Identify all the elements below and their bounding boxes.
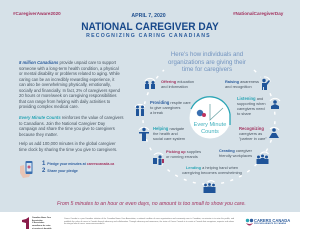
logo text: Carers Canada: CARERS CANADA	[254, 218, 290, 223]
text: providing: Providing respite care	[150, 100, 191, 105]
icon: helping	[138, 127, 150, 141]
footer: et services à domicile	[32, 228, 52, 230]
intro paragraph: caring can be an incredibly rewarding experience, it	[19, 76, 114, 82]
intro paragraph: or mental disability or problems related to aging. While	[19, 71, 120, 76]
logo text: Carers Canada: PROCHES AIDANTS DU CANADA	[254, 223, 286, 225]
logo text: association: L'Association	[32, 222, 44, 224]
tagline: From 5 minutes to an hour or even days, no amount is too small to show you care.	[57, 201, 246, 207]
text: offering: Offering education	[161, 78, 194, 84]
footer	[0, 212, 300, 232]
logo text: association	[32, 216, 52, 230]
text: raising	[225, 78, 259, 89]
pledge steps	[42, 160, 114, 174]
text: picking up: Picking up supplies	[166, 148, 201, 154]
campaign paragraph: Every Minute Counts reinforces the value of caregivers	[19, 115, 124, 120]
logo: Canadian Home Care Association	[22, 217, 29, 229]
intro paragraph: socially and financially. In fact, 2% of caregivers spend	[19, 88, 120, 92]
text: lending: caregiving becomes overwhelming	[182, 170, 242, 175]
pledge steps: 2 Share your pledge	[42, 168, 78, 174]
logo: Carers Canada	[246, 218, 254, 226]
logo text: association: canadienne de soins	[32, 225, 51, 227]
text: recognizing: "partner in care"	[239, 136, 267, 141]
intro paragraph: providing complex medical care.	[19, 104, 79, 109]
date: APRIL 7, 2020	[131, 13, 166, 19]
intro paragraph: 8 million Canadians provide unpaid care to support	[19, 60, 116, 65]
intro paragraph: that can range from helping with daily activities to	[19, 98, 110, 104]
intro paragraph: someone with a long-term health condition, a physical	[19, 66, 119, 70]
icon: raising	[260, 76, 270, 90]
text: offering	[161, 78, 194, 89]
text: picking up	[166, 148, 201, 159]
center circle: every minute counts	[190, 96, 231, 138]
text: lending	[182, 164, 242, 175]
icon: offering	[144, 78, 156, 89]
right heading: Here's how individuals and	[171, 51, 243, 58]
icon: picking up	[153, 152, 164, 165]
campaign paragraph: to Canadians. Join the National Caregiver Day	[19, 120, 105, 126]
campaign paragraph: because they matter.	[19, 132, 58, 136]
text: recognizing	[239, 126, 267, 141]
title: NATIONAL CAREGIVER DAY	[81, 21, 219, 33]
text: offering: and information	[161, 84, 188, 89]
center circle: every minute counts: Every Minute	[194, 122, 226, 128]
right heading: organizations are giving their	[168, 59, 246, 66]
right heading: time for caregivers	[182, 66, 232, 73]
campaign paragraph	[19, 115, 124, 137]
text: providing: a break	[150, 110, 163, 115]
right heading	[168, 51, 246, 73]
text: providing: to give caregivers	[150, 105, 180, 110]
icon: lending	[204, 180, 216, 193]
center circle: every minute counts: Counts	[201, 129, 219, 135]
logo text: association: Association	[32, 220, 43, 222]
logo text: association: Canadian Home Care	[32, 217, 51, 219]
call to action paragraph	[19, 141, 117, 152]
text: listening: Listening and	[237, 96, 263, 100]
icon: recognizing	[269, 127, 280, 138]
text: listening	[237, 96, 266, 116]
text: helping: Helping navigate	[153, 126, 184, 130]
subtitle: RECOGNIZING CARING CANADIANS	[86, 33, 211, 39]
text: raising: Raising awareness	[225, 78, 259, 84]
text: recognizing: caregivers as	[239, 131, 262, 136]
text: recognizing: Recognizing	[239, 126, 264, 130]
intro paragraph	[19, 60, 120, 109]
text: lending: Lending a helping hand when	[186, 164, 238, 170]
text: helping: the health and	[153, 131, 178, 136]
text: raising: and recognition	[225, 84, 252, 89]
text: listening: supporting when	[237, 101, 266, 106]
text: creating	[219, 148, 252, 158]
text: listening: to share	[237, 111, 251, 116]
intro paragraph: can also be overwhelming physically, emotionally,	[19, 82, 111, 87]
text: helping	[153, 126, 185, 141]
text: picking up: or running errands	[166, 154, 198, 159]
pledge steps: 1 Pledge your minutes at carerscanada.ca	[42, 161, 114, 167]
icon: hand holding phone	[20, 161, 32, 178]
call to action paragraph: time clock by sharing the time you give to caregivers.	[19, 146, 117, 152]
text: providing	[150, 100, 191, 115]
icon: providing	[134, 104, 146, 116]
intro paragraph: 20 hours or more/week on caregiving responsibilities	[19, 93, 117, 98]
text: creating: friendly workplaces	[219, 153, 252, 158]
campaign paragraph: campaign and share the time you give to caregivers	[19, 126, 115, 131]
icon: listening	[270, 98, 280, 109]
icon: creating	[256, 152, 269, 164]
hashtag right: #NationalCaregiverDay	[233, 11, 283, 16]
call to action paragraph: Help us add 100,000 minutes in the global caregiver	[19, 141, 116, 146]
text: helping: social care system	[153, 136, 185, 141]
footer note: Carers Canada is a pan-Canadian initiative of the Canadian Home Care Association, a national coalition of carer organizations and community care in Canadian; our mission is to raise the profile, and establish the value of carers in Canada through advocacy and collaboration. Through advocacy and awareness, the vision of Carers Canada is to create a Canada that recognizes, respects and values the integral role of carers. www.carerscanada.ca	[64, 218, 234, 225]
text: listening: caregivers need	[237, 106, 265, 111]
hashtag left: #CaregiverAware2020	[13, 11, 61, 16]
text: creating: Creating caregiver	[219, 148, 252, 152]
